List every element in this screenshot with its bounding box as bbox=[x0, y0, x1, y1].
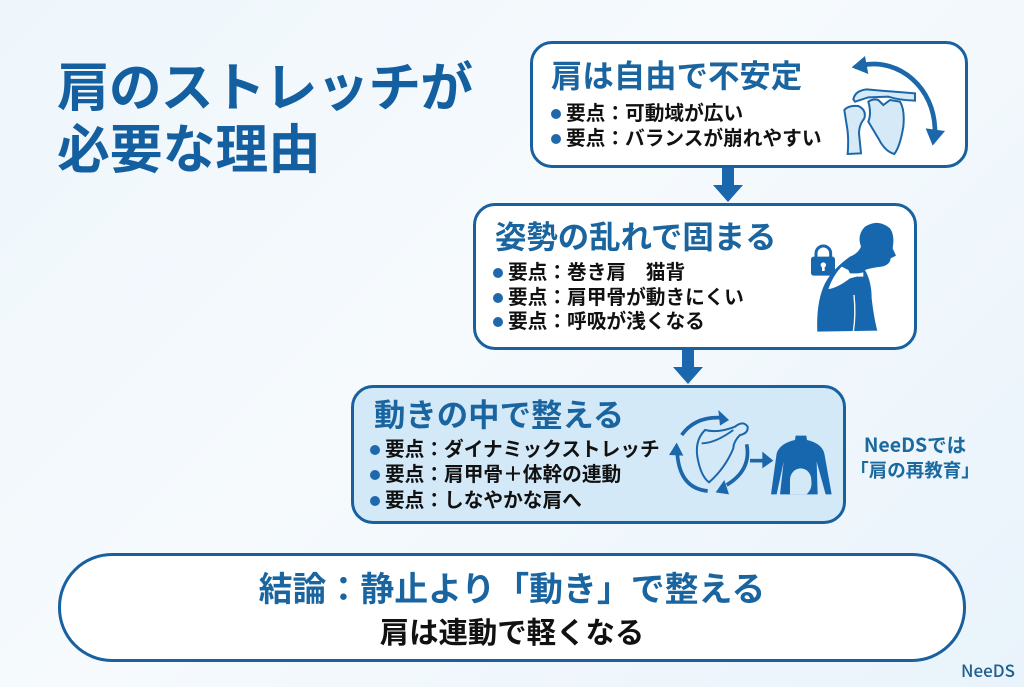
panel: conclusion bbox=[58, 553, 966, 662]
bullet: scapula: 要点：肩甲骨が動きにくい bbox=[508, 287, 744, 309]
bullet: rounded shoulders: 要点：巻き肩 猫背 bbox=[508, 262, 685, 284]
side note: 「肩の再教育」 bbox=[850, 457, 980, 483]
title bbox=[57, 59, 472, 180]
heading: move and adjust: 動きの中で整える bbox=[374, 398, 624, 433]
panel: posture bbox=[473, 203, 917, 350]
bullet: dynamic stretch: 要点：ダイナミックストレッチ bbox=[385, 439, 660, 461]
arrow: step 2 to step 3 bbox=[673, 350, 703, 384]
conclusion text: 肩は連動で軽くなる bbox=[380, 617, 644, 650]
heading: posture: 姿勢の乱れで固まる bbox=[495, 220, 777, 255]
bullet: linkage: 要点：肩甲骨＋体幹の連動 bbox=[385, 464, 621, 486]
heading: shoulder freedom: 肩は自由で不安定 bbox=[551, 59, 802, 94]
title: 肩のストレッチが bbox=[57, 59, 472, 118]
brand mark: NeeDS bbox=[961, 657, 1015, 682]
panel: shoulder freedom bbox=[530, 41, 968, 168]
bullet: supple shoulder: 要点：しなやかな肩へ bbox=[385, 490, 582, 512]
arrow: step 1 to step 2 bbox=[713, 168, 743, 202]
bullet: breathing: 要点：呼吸が浅くなる bbox=[508, 311, 705, 333]
title: 必要な理由 bbox=[57, 121, 321, 180]
side note: NeeDSでは bbox=[864, 429, 966, 458]
side note bbox=[850, 429, 980, 483]
conclusion heading: 結論：静止より「動き」で整える bbox=[259, 571, 765, 609]
panel: move and adjust bbox=[351, 385, 846, 524]
bullet: balance: 要点：バランスが崩れやすい bbox=[566, 128, 822, 150]
bullet: range of motion: 要点：可動域が広い bbox=[566, 103, 743, 125]
